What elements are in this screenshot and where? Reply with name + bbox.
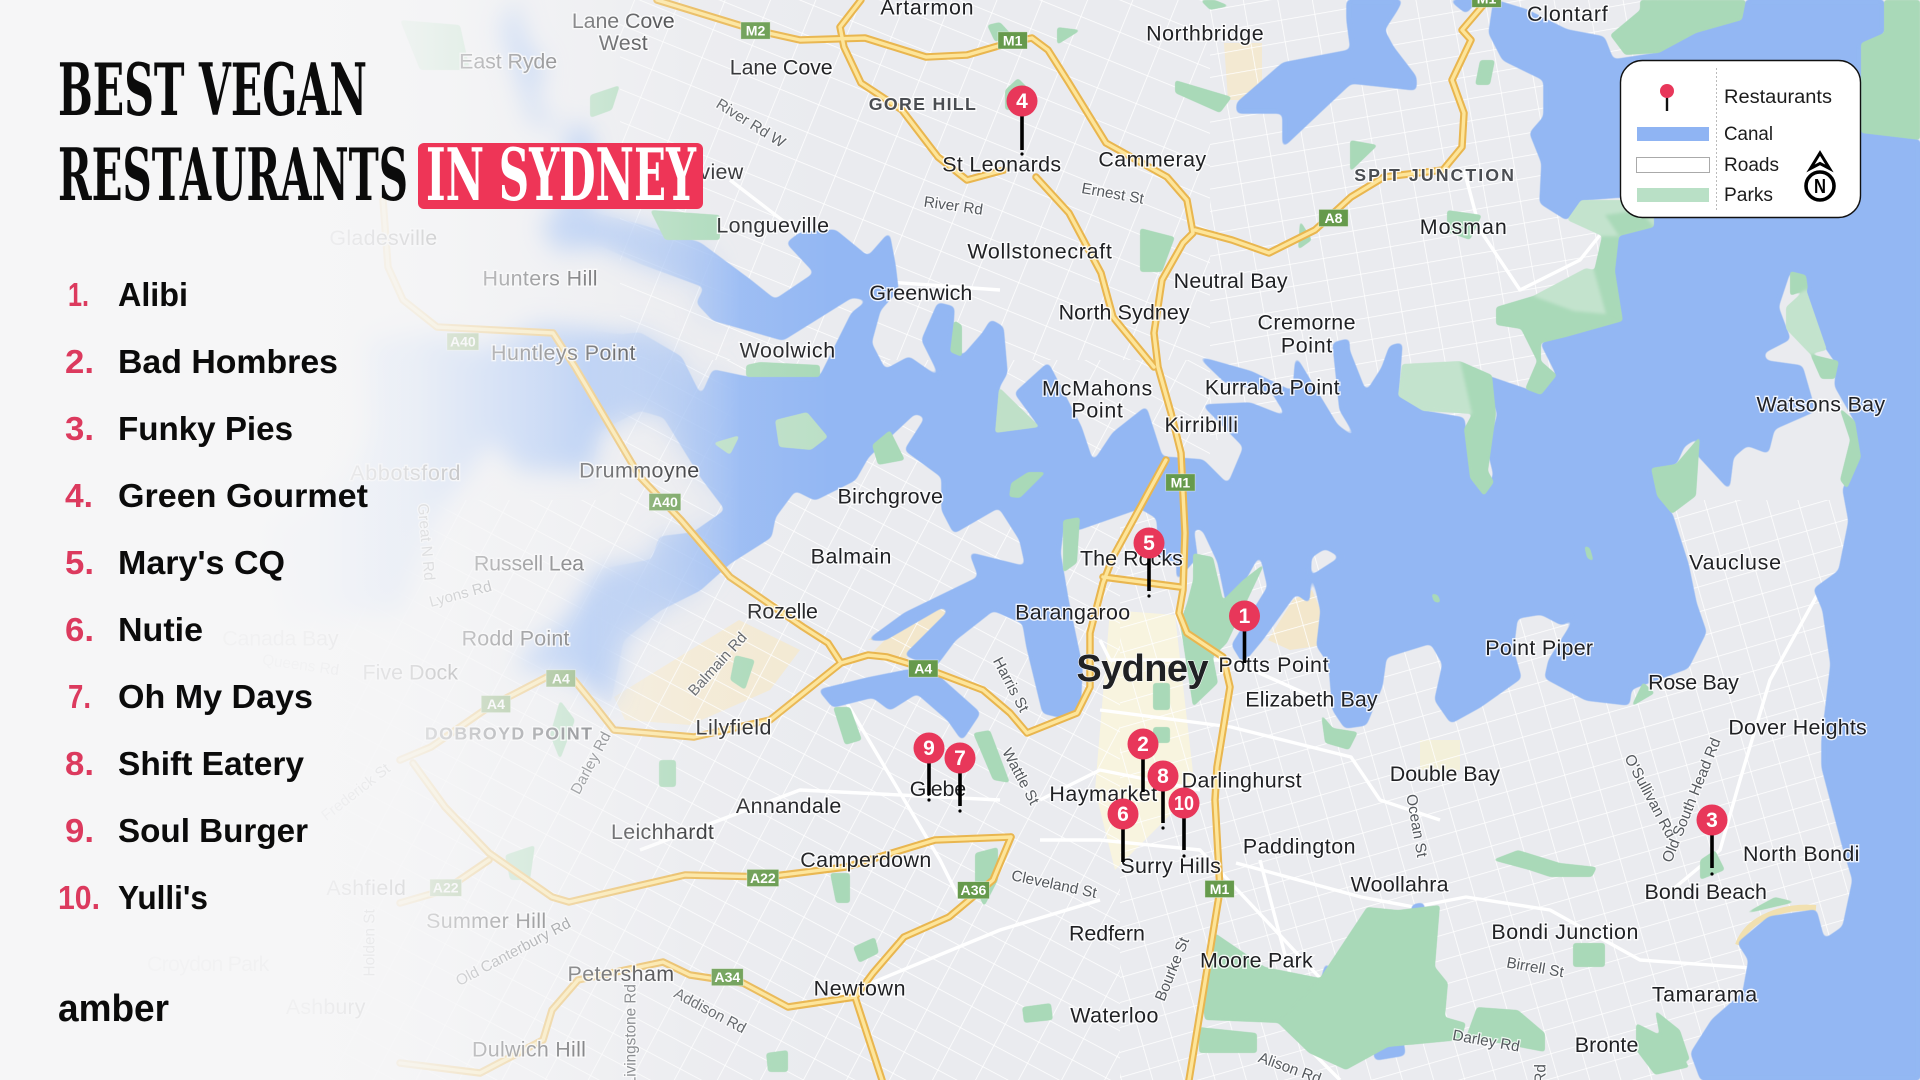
rotated street labels: Darley Rd: [1451, 1027, 1521, 1056]
legend panel: [1620, 60, 1860, 218]
suburb place labels: Rose Bay: [1648, 670, 1739, 694]
suburb place labels: St Leonards: [942, 152, 1061, 176]
highway shields: A40: [450, 334, 476, 350]
item 4: Green Gourmet: [118, 477, 368, 514]
suburb place labels: Mosman: [1420, 215, 1507, 239]
suburb place labels: Woolwich: [740, 339, 835, 363]
item 3: Funky Pies: [118, 410, 293, 447]
suburb place labels: Canada Bay: [222, 626, 339, 650]
suburb place labels: Dulwich Hill: [472, 1038, 586, 1062]
suburb place labels: Camperdown: [800, 848, 931, 872]
suburb place labels: Neutral Bay: [1174, 269, 1288, 293]
pin 5: [1134, 528, 1164, 598]
suburb place labels: Balmain: [811, 544, 891, 568]
suburb place labels: Huntleys Point: [491, 341, 636, 365]
suburb place labels: Lilyfield: [696, 716, 771, 740]
suburb place labels: Wollstonecraft: [967, 239, 1112, 263]
rotated street labels: Wattle St: [998, 746, 1043, 808]
item 10: [58, 879, 208, 916]
suburb place labels: Watsons Bay: [1757, 392, 1885, 416]
pin 10: [1168, 788, 1200, 858]
legend: canal: [1637, 124, 1773, 145]
highway shields: M2: [746, 23, 765, 39]
highway shields: A4: [552, 670, 570, 686]
rotated street labels: Holden St: [362, 909, 379, 976]
rotated street labels: Cleveland St: [1010, 867, 1099, 902]
rotated street labels: Frederick St: [318, 760, 394, 824]
suburb place labels: Cremorne: [1258, 310, 1356, 334]
map pins: [914, 86, 1728, 876]
highway shields: A36: [961, 882, 987, 898]
suburb place labels: Hunters Hill: [482, 266, 598, 290]
pin 7: 7: [954, 747, 966, 770]
suburb place labels: Sydney: [1076, 648, 1209, 690]
suburb place labels: Kurraba Point: [1205, 375, 1340, 399]
highway shields: A34: [714, 969, 740, 985]
rotated street labels: [261, 96, 1724, 1080]
legend: parks: Parks: [1724, 185, 1773, 206]
suburb place labels: Cammeray: [1098, 148, 1206, 172]
highway shields: A4: [487, 696, 505, 712]
highway shields: M1: [1210, 881, 1230, 897]
suburb place labels: Rodd Point: [462, 626, 569, 650]
suburb place labels: Drummoyne: [579, 459, 699, 483]
highway shields: A40: [652, 494, 678, 510]
highway shields: M1: [1171, 474, 1190, 490]
legend: roads: Roads: [1724, 155, 1779, 176]
rotated street labels: Harris St: [989, 655, 1032, 716]
left white fade overlay: [0, 0, 830, 1080]
icon: north arrow: N: [1814, 176, 1826, 198]
red badge: in Sydney: IN SYDNEY: [426, 132, 697, 217]
red badge: in Sydney: [418, 132, 703, 217]
rotated street labels: O'Sullivan Rd: [1621, 752, 1679, 841]
suburb place labels: Double Bay: [1390, 762, 1500, 786]
legend: restaurants pin: [1660, 84, 1832, 111]
pin 3: [1696, 804, 1728, 876]
item 5: Mary's CQ: [118, 544, 285, 581]
legend: restaurants pin: Restaurants: [1724, 87, 1832, 108]
item 7: 7.: [68, 678, 91, 715]
suburb place labels: Abbotsford: [350, 461, 460, 485]
item 3: 3.: [65, 410, 94, 447]
suburb place labels: Potts Point: [1218, 653, 1329, 677]
icon: north arrow: [1806, 153, 1834, 200]
suburb place labels: Rozelle: [747, 599, 818, 623]
item 7: Oh My Days: [118, 678, 313, 715]
suburb place labels: Croydon Park: [147, 952, 270, 976]
item 8: Shift Eatery: [118, 745, 305, 782]
item 9: Soul Burger: [118, 812, 308, 849]
pin 3: 3: [1706, 809, 1718, 832]
suburb place labels: Clontarf: [1527, 2, 1608, 26]
suburb place labels: Tamarama: [1652, 983, 1757, 1007]
legend: roads: [1636, 155, 1779, 176]
suburb place labels: Annandale: [736, 794, 841, 818]
suburb place labels: Greenwich: [869, 281, 972, 305]
restaurant list: [58, 276, 368, 916]
item 2: Bad Hombres: [118, 343, 338, 380]
suburb place labels: North Bondi: [1743, 842, 1859, 866]
suburb place labels: Dover Heights: [1728, 716, 1867, 740]
rotated street labels: Ernest St: [1080, 180, 1146, 208]
title line 2: RESTAURANTS: [58, 132, 408, 217]
parks and green space: [400, 0, 1920, 1075]
suburb place labels: Summer Hill: [426, 909, 546, 933]
suburb place labels: Surry Hills: [1120, 854, 1221, 878]
suburb place labels: Haymarket: [1049, 782, 1157, 806]
suburb place labels: Newtown: [814, 977, 906, 1001]
legend: parks: [1637, 185, 1773, 206]
pin 4: [1006, 86, 1038, 156]
rotated street labels: Great N Rd: [414, 503, 438, 581]
suburb place labels: East Ryde: [459, 50, 557, 74]
suburb place labels: Northbridge: [1146, 21, 1264, 45]
suburb place labels: Paddington: [1243, 834, 1356, 858]
suburb place labels: Bondi Junction: [1491, 920, 1638, 944]
item 2: 2.: [65, 343, 94, 380]
suburb place labels: Ashbury: [286, 995, 366, 1019]
item 1: 1.: [68, 276, 89, 313]
suburb place labels: Five Dock: [362, 661, 458, 685]
item 10: 10.: [58, 879, 100, 916]
suburb place labels: Lane Cove: [730, 56, 833, 80]
suburb place labels: Point: [1071, 399, 1123, 423]
suburb place labels: SPIT JUNCTION: [1354, 165, 1516, 185]
pin 1: 1: [1239, 605, 1251, 628]
item 10: Yulli's: [118, 879, 208, 916]
rotated street labels: River Rd W: [713, 96, 789, 152]
highways: [383, 0, 1485, 1080]
suburb place labels: Elizabeth Bay: [1245, 688, 1378, 712]
highway shields: [430, 0, 1501, 986]
suburb place labels: McMahons: [1042, 377, 1152, 401]
suburb place labels: Petersham: [568, 962, 674, 986]
suburb place labels: Barangaroo: [1015, 601, 1130, 625]
highway shields: A4: [914, 660, 932, 676]
rotated street labels: Lyons Rd: [427, 578, 494, 611]
rotated street labels: Ocean St: [1402, 793, 1430, 859]
suburb place labels: The Rocks: [1080, 547, 1183, 571]
suburb place labels: Riverview: [648, 160, 744, 184]
suburb place labels: Leichhardt: [611, 820, 714, 844]
suburb place labels: Russell Lea: [474, 552, 584, 576]
pin 8: 8: [1157, 765, 1169, 788]
suburb place labels: West: [599, 31, 648, 55]
suburb place labels: Moore Park: [1200, 948, 1313, 972]
pin 2: [1128, 728, 1158, 792]
title line 1: BEST VEGAN: [58, 47, 367, 132]
suburb place labels: Point: [1281, 334, 1332, 358]
pin 7: [944, 742, 976, 813]
suburb place labels: Vaucluse: [1689, 550, 1781, 574]
pin 9: 9: [923, 737, 935, 760]
rotated street labels: Addison Rd: [671, 985, 749, 1037]
pin 8: [1148, 760, 1178, 830]
item 1: Alibi: [118, 276, 188, 313]
item 9: 9.: [65, 812, 94, 849]
rotated street labels: Bourke St: [1152, 934, 1193, 1004]
item 6: [65, 611, 203, 648]
title: [58, 47, 703, 217]
highway shields: M1: [1003, 32, 1023, 48]
rotated street labels: Queens Rd: [261, 652, 340, 679]
highway shields: A22: [750, 870, 776, 886]
pin 1: [1229, 600, 1260, 663]
suburb place labels: Bronte: [1575, 1033, 1638, 1057]
suburb place labels: GORE HILL: [869, 94, 978, 114]
rotated street labels: Darley Rd: [568, 729, 615, 797]
item 6: Nutie: [118, 611, 203, 648]
rotated street labels: Birrell St: [1505, 954, 1566, 981]
rotated street labels: Balmain Rd: [685, 629, 751, 699]
item 4: 4.: [65, 477, 93, 514]
suburb place labels: Lane Cove: [572, 9, 675, 33]
legend: canal: Canal: [1724, 124, 1773, 145]
suburb place labels: DOBROYD POINT: [425, 724, 594, 744]
item 5: 5.: [65, 544, 94, 581]
rotated street labels: Old Canterbury Rd: [453, 915, 574, 990]
suburb place labels: Point Piper: [1485, 636, 1593, 660]
suburb place labels: Kirribilli: [1164, 413, 1238, 437]
pin 6: [1108, 798, 1138, 862]
suburb place labels: North Sydney: [1059, 301, 1190, 325]
suburb place labels: Gladesville: [329, 226, 437, 250]
item 6: 6.: [65, 611, 94, 648]
suburb place labels: Longueville: [716, 214, 829, 238]
pin 6: 6: [1117, 803, 1129, 826]
rotated street labels: River Rd: [923, 194, 984, 219]
suburb place labels: Ashfield: [326, 876, 406, 900]
suburb place labels: Redfern: [1069, 921, 1145, 945]
highway shields: A22: [433, 880, 459, 896]
pin 9: [914, 732, 944, 802]
suburb place labels: Waterloo: [1070, 1003, 1158, 1027]
suburb place labels: Bondi Beach: [1644, 880, 1767, 904]
suburb place labels: Woollahra: [1351, 872, 1449, 896]
pin 10: 10: [1174, 793, 1194, 815]
item 8: 8.: [65, 745, 94, 782]
pin 4: 4: [1016, 90, 1028, 113]
suburb place labels: Glebe: [910, 777, 966, 801]
highway shields: A8: [1324, 210, 1343, 226]
rotated street labels: Old South Head Rd: [1659, 736, 1724, 865]
item 1: [68, 276, 188, 313]
logo: amber: amber: [58, 988, 169, 1030]
pin 5: 5: [1143, 532, 1155, 555]
sandy and commercial land tints: [614, 43, 1460, 870]
suburb place labels: Darlinghurst: [1182, 768, 1302, 792]
pin 2: 2: [1137, 733, 1149, 756]
suburb place labels: Birchgrove: [838, 484, 943, 508]
